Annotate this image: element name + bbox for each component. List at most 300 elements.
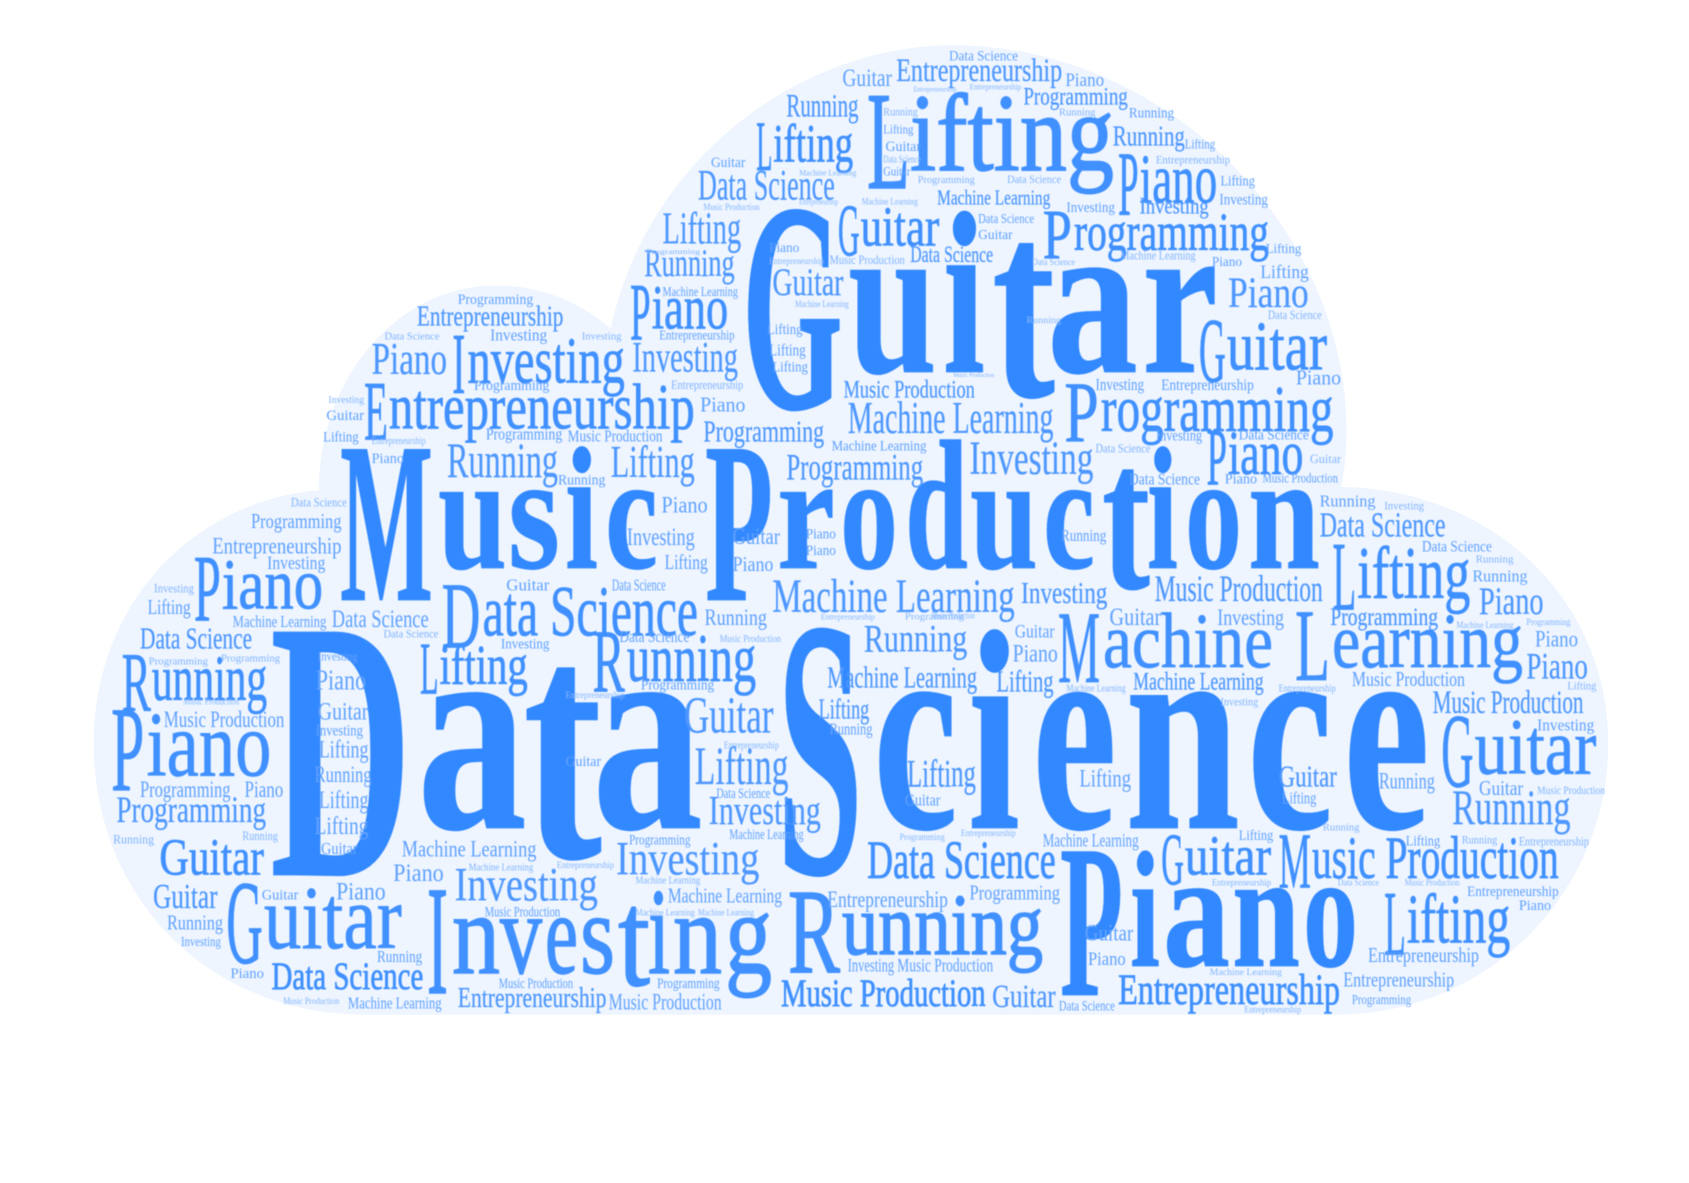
smaller words: Music Production — [843, 374, 975, 403]
medium words: P — [1043, 197, 1072, 275]
small filler words: Entrepreneurship — [212, 534, 341, 560]
small filler words: Piano — [1225, 472, 1257, 488]
tiny filler words: Running — [113, 831, 155, 846]
word: Music Production: d — [905, 404, 968, 609]
word: Running large: unning — [842, 876, 1043, 973]
small filler words: Music Production — [1352, 667, 1465, 691]
small filler words: Entrepreneurship — [1467, 884, 1559, 900]
small filler words: Guitar — [1110, 602, 1162, 631]
smaller words: Lifting — [662, 203, 741, 253]
word: Lifting large: L — [867, 64, 910, 219]
tiny filler words: Entrepreneurship — [566, 690, 625, 701]
small filler words: Programming — [1352, 993, 1411, 1008]
small filler words: Running — [558, 473, 606, 489]
word cloud text — [111, 48, 1605, 1043]
small filler words: Running — [1379, 769, 1435, 795]
word: Investing large: s — [580, 871, 615, 999]
smaller words: Entrepreneurship — [458, 983, 606, 1014]
smaller words: Programming — [703, 415, 824, 449]
smaller words: Running — [1452, 780, 1571, 835]
small filler words: Lifting — [1239, 828, 1274, 844]
small filler words: Piano — [1013, 638, 1058, 667]
smaller words: Running — [864, 618, 967, 661]
tiny filler words: Investing — [1220, 695, 1258, 709]
medium words: I — [452, 315, 465, 412]
word: Data Science — [270, 544, 1430, 956]
small filler words: Machine Learning — [662, 285, 738, 300]
word: Music Production: u — [438, 421, 507, 604]
small filler words: Piano — [1088, 949, 1126, 970]
tiny filler words: Machine Learning — [862, 197, 918, 208]
small filler words: Music Production — [609, 989, 722, 1015]
small filler words: Machine Learning — [348, 993, 442, 1012]
word: Music Production: M — [340, 395, 433, 650]
tiny filler words: Entrepreneurship — [372, 435, 425, 447]
small filler words: Piano — [700, 392, 745, 416]
smaller words: Machine Learning — [848, 393, 1054, 443]
word: Guitar: u — [848, 175, 937, 421]
small filler words: Piano — [231, 966, 264, 982]
word: Piano large: a — [1163, 819, 1230, 1002]
small filler words: Piano — [661, 493, 708, 519]
small filler words: Programming — [474, 378, 550, 394]
small filler words: Investing — [1219, 192, 1268, 209]
word: Investing large: t — [618, 862, 650, 1015]
smaller words: Running — [786, 87, 859, 123]
small filler words: Piano — [245, 777, 283, 803]
small filler words: Data Science — [1129, 470, 1200, 489]
small filler words: Data Science — [1239, 427, 1309, 443]
medium words: uitar — [1185, 826, 1271, 888]
tiny filler words: Guitar — [1310, 451, 1342, 466]
word: Running large — [788, 865, 1043, 999]
medium words: R — [122, 636, 151, 730]
word: Music Production: n — [1248, 421, 1320, 604]
small filler words: Entrepreneurship — [1343, 968, 1454, 992]
tiny filler words: Running — [1462, 832, 1497, 846]
smaller words: Investing — [616, 834, 759, 886]
small filler words: Lifting — [772, 360, 808, 376]
small filler words: Piano — [372, 451, 404, 467]
tiny filler words: Machine Learning — [1456, 620, 1514, 631]
word: Music Production — [340, 395, 1320, 650]
words inside the letter D: Lifting — [319, 734, 368, 763]
small filler words: Running — [167, 911, 223, 935]
small filler words: Machine Learning — [729, 827, 804, 843]
small filler words: Piano — [393, 858, 444, 887]
smaller words: Data Science — [1320, 506, 1446, 544]
word: Investing large — [427, 854, 772, 1027]
small filler words: Guitar — [1015, 622, 1055, 643]
word: Music Production: t — [1102, 402, 1150, 634]
small filler words: Lifting — [767, 322, 803, 338]
tiny filler words: Music Production — [932, 610, 975, 621]
word: Guitar: r — [1142, 175, 1218, 421]
words inside the letter D: Investing — [316, 723, 363, 740]
medium words: G — [1441, 692, 1474, 809]
small filler words: Music Production — [1262, 472, 1338, 487]
tiny filler words: Entrepreneurship — [557, 860, 614, 871]
small filler words: Investing — [1156, 428, 1202, 445]
small filler words: Programming — [969, 880, 1060, 904]
small filler words: Piano — [1296, 366, 1341, 390]
small filler words: Lifting — [883, 122, 914, 137]
medium words: G — [838, 190, 860, 272]
small filler words: Piano — [732, 552, 773, 576]
small filler words: Guitar — [885, 139, 921, 155]
small filler words: Investing — [848, 956, 894, 977]
display-scale words — [111, 48, 1605, 1016]
medium words: L — [420, 629, 438, 711]
small filler words: Guitar — [842, 63, 892, 92]
medium words: Guitar — [159, 830, 264, 887]
small filler words: Running — [829, 720, 873, 739]
medium words — [111, 108, 1596, 1015]
small filler words: Running — [704, 605, 767, 631]
medium words: L — [1384, 872, 1406, 975]
small filler words: Machine Learning — [1043, 831, 1139, 852]
medium words: iano — [652, 273, 728, 343]
tiny filler words: Data Science — [383, 627, 438, 641]
words inside the letter D: Investing — [318, 648, 358, 663]
tiny filler words: Data Science — [1007, 172, 1061, 186]
medium words: Music Production — [781, 972, 986, 1015]
small filler words: Piano — [336, 876, 386, 905]
tiny filler words: Music Production — [183, 696, 239, 707]
medium words: P — [1118, 132, 1139, 235]
tiny filler words: Entrepreneurship — [961, 828, 1016, 839]
small filler words: Guitar — [566, 754, 601, 770]
small filler words: Piano — [1535, 626, 1578, 652]
smaller words: Guitar — [684, 687, 773, 744]
smaller words: Entrepreneurship — [896, 52, 1062, 88]
tiny filler words: Programming — [918, 174, 975, 186]
word: Music Production: c — [1043, 421, 1095, 604]
smaller words: Lifting — [907, 752, 976, 795]
word: Music Production: s — [508, 421, 560, 604]
tiny filler words: Programming — [899, 832, 945, 843]
medium words: P — [1206, 412, 1227, 503]
word: Data Science: c — [1247, 570, 1333, 891]
tiny filler words: Running — [1027, 315, 1061, 326]
tiny filler words: Music Production — [953, 372, 995, 379]
small filler words: Machine Learning — [402, 836, 537, 862]
word: Entrepreneurship large: ntrepreneurship — [389, 371, 695, 443]
smaller words: Investing — [1140, 193, 1209, 219]
tiny filler words: Music Production — [703, 202, 760, 213]
smaller words: Running — [1113, 121, 1185, 152]
smaller words: Piano — [372, 334, 447, 384]
tiny filler words: Entrepreneurship — [1212, 877, 1271, 888]
smaller words: Running — [447, 433, 558, 488]
small filler words: Guitar — [1085, 920, 1133, 946]
word: Music Production: o — [1185, 421, 1242, 604]
smaller words: Data Science — [140, 621, 252, 655]
small filler words: Investing — [1217, 605, 1284, 631]
small filler words: Lifting — [1079, 763, 1131, 792]
smaller words: Lifting — [611, 437, 695, 487]
word: Data Science: a — [592, 570, 703, 891]
smaller words: Lifting — [819, 694, 869, 725]
word: Piano large: P — [1060, 801, 1123, 1043]
word: Data Science: c — [873, 570, 958, 891]
small filler words: Data Science — [1059, 998, 1115, 1014]
tiny filler words: Music Production — [829, 252, 905, 267]
small filler words: Machine Learning — [233, 612, 327, 631]
word: Entrepreneurship large: E — [364, 364, 388, 458]
medium words: D — [442, 563, 480, 668]
medium words: L — [756, 108, 772, 186]
tiny filler words: Investing — [582, 330, 622, 342]
small filler words: Data Science — [978, 212, 1034, 227]
tiny filler words: Music Production — [1537, 783, 1605, 797]
word: Lifting large: ifting — [910, 72, 1114, 194]
small filler words: Guitar — [711, 155, 745, 171]
smaller words: Programming — [1023, 81, 1128, 110]
tiny filler words: Data Science — [291, 494, 347, 509]
smaller words: Machine Learning — [827, 660, 977, 694]
word: Machine Learning: M — [1058, 591, 1100, 705]
tiny filler words: Entrepreneurship — [913, 85, 957, 94]
word: Piano large: n — [1232, 819, 1300, 1002]
smaller words: Piano — [1526, 646, 1588, 687]
tiny filler words: Machine Learning — [1210, 967, 1282, 978]
medium words: P — [194, 535, 221, 641]
medium words: Data Science — [271, 955, 423, 998]
small filler words — [140, 48, 1595, 1015]
small filler words: Programming — [657, 976, 720, 992]
smaller words — [116, 52, 1588, 1014]
small filler words: Lifting — [1260, 262, 1309, 283]
tiny filler words — [113, 81, 1605, 1016]
small filler words: Programming — [486, 424, 563, 443]
medium words: M — [1279, 818, 1311, 906]
small filler words: Running — [1473, 567, 1528, 586]
medium words: uitar — [1475, 703, 1596, 791]
small filler words: Data Science — [612, 575, 666, 594]
tiny filler words: Machine Learning — [1066, 683, 1126, 695]
word: Guitar: t — [992, 155, 1057, 455]
smaller words: Investing — [1021, 576, 1107, 610]
medium words: nvesting — [468, 324, 625, 397]
medium words: iano — [1140, 142, 1217, 219]
small filler words: Investing — [267, 553, 326, 574]
tiny filler words: Data Science — [385, 330, 440, 342]
small filler words: Investing — [627, 522, 695, 551]
word: Music Production: r — [777, 421, 835, 604]
tiny filler words: Entrepreneurship — [671, 377, 743, 392]
word: Investing large: I — [427, 854, 448, 1027]
small filler words: Investing — [1537, 715, 1595, 734]
word: Machine Learning: earning — [1332, 597, 1523, 684]
tiny filler words: Entrepreneurship — [769, 256, 824, 267]
tiny filler words: Investing — [154, 580, 194, 595]
word: Machine Learning: L — [1295, 589, 1330, 703]
word: Music Production: i — [1147, 412, 1178, 606]
word: Piano large — [1060, 801, 1358, 1043]
word: Music Production: P — [705, 395, 773, 650]
tiny filler words: Machine Learning — [1120, 248, 1196, 263]
medium words: iano — [146, 694, 271, 797]
small filler words: Music Production — [164, 707, 284, 733]
tiny filler words: Data Science — [1032, 257, 1075, 268]
smaller words: Music Production — [1433, 684, 1583, 720]
tiny filler words: Data Science — [1268, 307, 1322, 322]
smaller words: Investing — [969, 433, 1093, 485]
tiny filler words: Machine Learning — [795, 299, 849, 310]
word: Music Production: u — [970, 421, 1038, 604]
word: Piano large: i — [1130, 818, 1160, 1002]
word: Data Science: i — [968, 573, 1020, 890]
tiny filler words: Programming — [221, 652, 281, 664]
small filler words: Programming — [251, 509, 342, 533]
word: Investing large: n — [673, 871, 722, 999]
medium words: L — [1332, 524, 1356, 632]
small filler words: Data Science — [619, 627, 690, 646]
small filler words: Guitar — [506, 575, 550, 594]
small filler words: Entrepreneurship — [1368, 943, 1479, 967]
smaller words: Programming — [1330, 602, 1438, 631]
word: Data Science: S — [777, 544, 863, 954]
words inside the letter D — [315, 648, 372, 858]
small filler words: Piano — [806, 527, 836, 543]
tiny filler words: Running — [1476, 553, 1514, 565]
small filler words: Machine Learning — [668, 884, 782, 908]
medium words: Data Science — [867, 830, 1056, 890]
words inside the letter D: Lifting — [319, 785, 368, 814]
medium words: R — [592, 611, 625, 712]
word: Music Production: c — [605, 421, 658, 604]
small filler words: Lifting — [148, 595, 191, 619]
word: Machine Learning — [1058, 589, 1523, 705]
small filler words: Entrepreneurship — [1161, 377, 1254, 394]
tiny filler words: Machine Learning — [636, 908, 695, 919]
small filler words: Lifting — [769, 340, 806, 359]
tiny filler words: Entrepreneurship — [1279, 683, 1336, 695]
small filler words: Guitar — [883, 164, 911, 179]
word: Lifting large — [867, 64, 1114, 219]
small filler words: Lifting — [323, 430, 359, 446]
word: Running large: R — [788, 865, 840, 999]
medium words: uitar — [1227, 308, 1327, 385]
medium words: ifting — [1357, 533, 1470, 615]
small filler words: Data Science — [1422, 539, 1492, 556]
small filler words: Music Production — [897, 956, 993, 977]
small filler words: Machine Learning — [832, 438, 927, 454]
small filler words: Programming — [458, 292, 534, 308]
medium words: usic Production — [1312, 825, 1559, 892]
medium words: uitar — [264, 867, 402, 968]
small filler words: Programming — [629, 833, 691, 849]
small filler words: Running — [377, 947, 423, 966]
word: Piano large: o — [1303, 819, 1358, 1002]
medium words: ifting — [773, 114, 853, 174]
medium words: rogramming — [1074, 202, 1269, 262]
tiny filler words: Investing — [1384, 499, 1424, 513]
small filler words: Piano — [1065, 70, 1104, 91]
word: Data Science: e — [1032, 570, 1117, 891]
words inside the letter D: Piano — [316, 665, 366, 696]
small filler words: Data Science — [949, 48, 1018, 64]
word: Guitar: i — [943, 166, 985, 423]
smaller words: Entrepreneurship — [417, 301, 563, 332]
small filler words: Programming — [641, 677, 715, 693]
medium words: ifting — [439, 635, 528, 697]
word: Guitar — [742, 141, 1218, 473]
tiny filler words: Entrepreneurship — [1519, 834, 1589, 849]
tiny filler words: Running — [1059, 106, 1096, 118]
medium words: rogramming — [1101, 373, 1334, 446]
small filler words: Music Production — [568, 427, 663, 446]
tiny filler words: Machine Learning — [636, 874, 701, 886]
smaller words: Investing — [632, 335, 738, 382]
smaller words: Machine Learning — [1133, 666, 1264, 695]
small filler words: Guitar — [1479, 776, 1523, 800]
small filler words: Lifting — [1185, 138, 1215, 153]
tiny filler words: Music Production — [283, 996, 339, 1007]
small filler words: Lifting — [1282, 789, 1317, 808]
small filler words: Lifting — [1220, 173, 1255, 189]
small filler words: Guitar — [262, 887, 298, 903]
smaller words: Guitar — [992, 978, 1056, 1014]
small filler words: Guitar — [326, 408, 364, 424]
medium words: unning — [152, 642, 267, 714]
smaller words: Programming — [116, 789, 266, 830]
tiny filler words: Machine Learning — [799, 168, 857, 178]
smaller words: Guitar — [772, 261, 844, 304]
tiny filler words: Running — [883, 104, 918, 118]
small filler words: Running — [1320, 491, 1376, 510]
small filler words: Guitar — [978, 228, 1013, 243]
word: Guitar: G — [742, 141, 843, 473]
small filler words: Data Science — [716, 786, 770, 802]
smaller words: Data Science — [910, 242, 993, 268]
word: Entrepreneurship large — [364, 364, 695, 458]
smaller words: Piano — [1479, 580, 1544, 623]
smaller words: Machine Learning — [772, 571, 1015, 623]
word: Investing large: v — [500, 871, 542, 999]
words inside the letter D: Running — [315, 762, 372, 788]
medium words: P — [1064, 364, 1099, 461]
tiny filler words: Entrepreneurship — [1156, 153, 1230, 167]
word: Investing large: g — [725, 871, 772, 999]
tiny filler words: Entrepreneurship — [724, 740, 779, 752]
tiny filler words: Music Production — [720, 633, 781, 645]
smaller words: Running — [644, 242, 735, 285]
words inside the letter D: Guitar — [318, 697, 369, 726]
medium words: uitar — [861, 197, 940, 259]
small filler words: Investing — [181, 935, 221, 950]
small filler words: Investing — [501, 636, 550, 652]
small filler words: Piano — [769, 241, 799, 256]
small filler words: Piano — [806, 543, 836, 559]
small filler words: Entrepreneurship — [659, 328, 735, 343]
smaller words: Programming — [786, 446, 923, 487]
tiny filler words: Machine Learning — [469, 861, 534, 873]
tiny filler words: Entrepreneurship — [969, 81, 1021, 91]
smaller words: Investing — [709, 788, 821, 833]
word: Data Science: D — [270, 545, 412, 956]
small filler words: Music Production — [485, 905, 560, 921]
words inside the letter D: Lifting — [315, 811, 368, 840]
small filler words: Music Production — [499, 976, 573, 992]
smaller words: Piano — [1228, 270, 1309, 317]
tiny filler words: Machine Learning — [698, 908, 754, 919]
small filler words: Programming — [140, 777, 231, 803]
word: Investing large: n — [452, 871, 500, 999]
medium words: G — [1161, 819, 1184, 901]
word: Guitar: a — [1047, 175, 1138, 421]
